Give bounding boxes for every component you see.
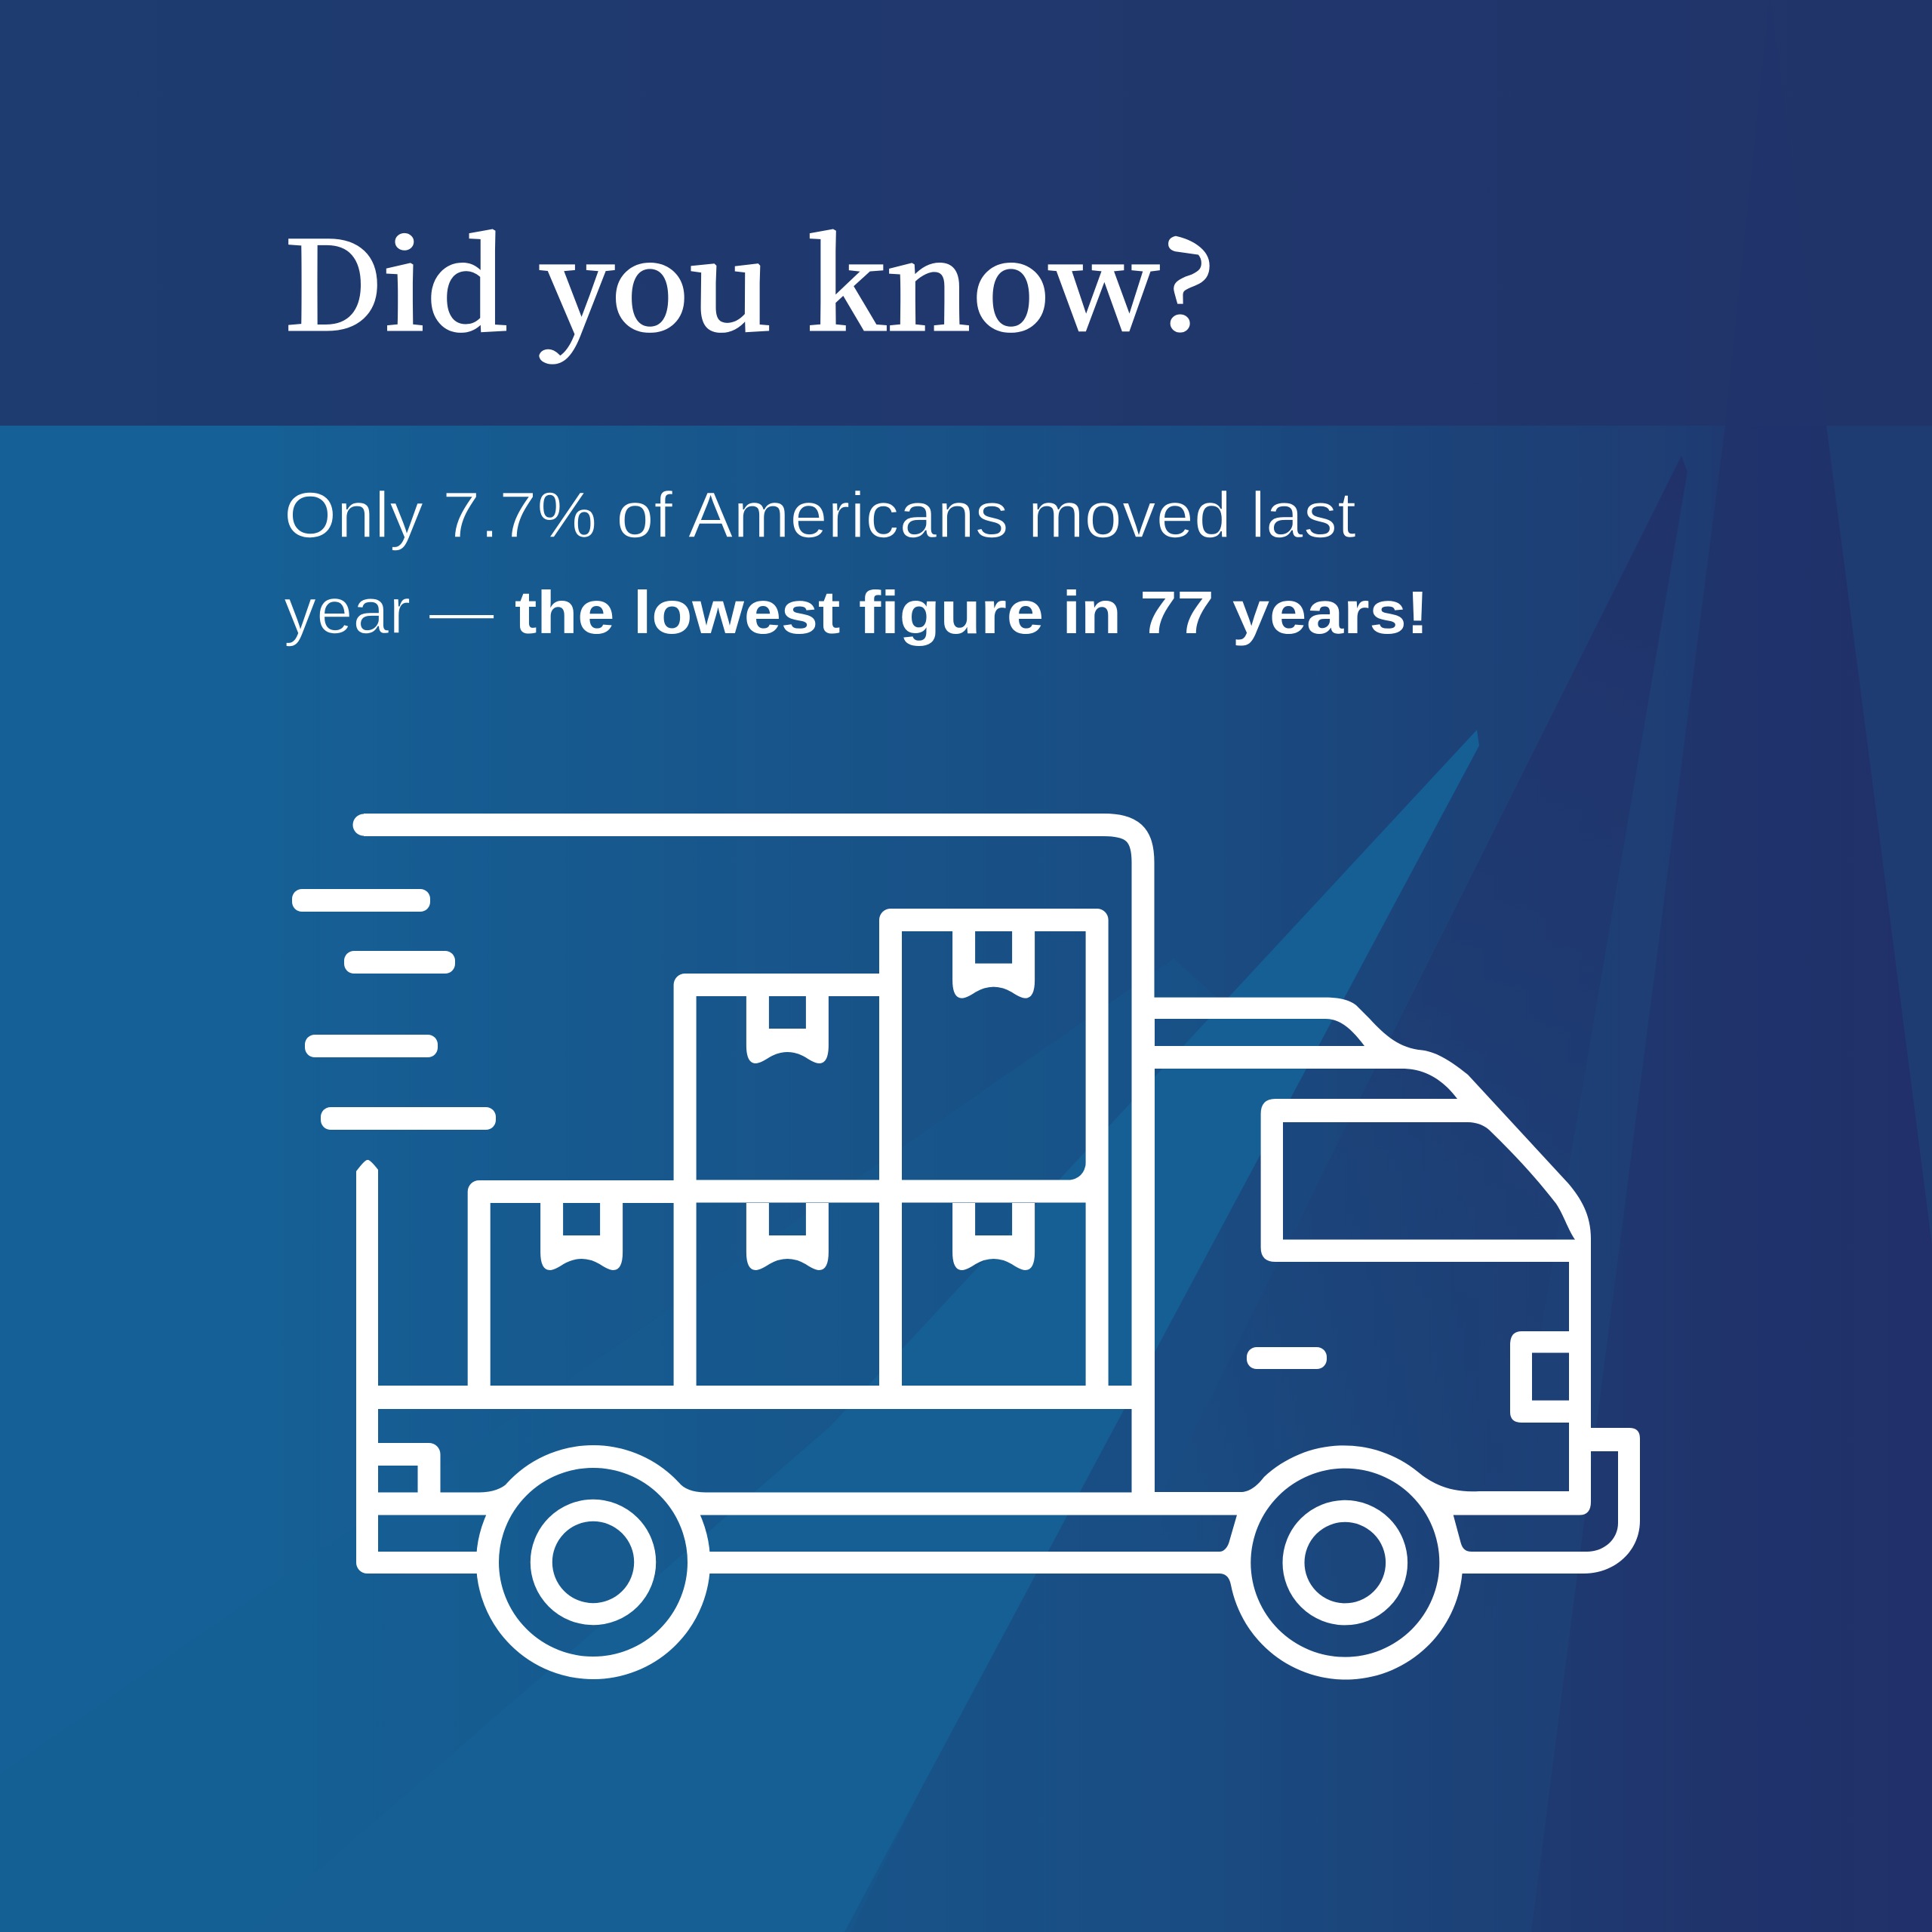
box tape: top middle box bbox=[746, 996, 829, 1063]
title: Did you know? bbox=[283, 188, 1216, 365]
body text line 2 regular: year — bbox=[284, 575, 494, 648]
box tape: bottom right box bbox=[952, 1203, 1035, 1270]
truck bed frame and box outlines bbox=[364, 825, 1144, 1562]
wheel arch fillets bbox=[479, 1482, 512, 1502]
post tip bbox=[356, 1160, 378, 1176]
speed lines bbox=[292, 889, 496, 1130]
rear wheel bbox=[488, 1457, 699, 1668]
body text line 1: Only 7.7% of Americans moved last bbox=[284, 479, 1356, 552]
box tape: top right box bbox=[952, 931, 1035, 998]
front wheel hub bbox=[1294, 1511, 1397, 1614]
truck cab silhouette with window, bumper and front wheel arch bbox=[1143, 998, 1640, 1680]
door handle bbox=[1247, 1347, 1327, 1369]
box tape: bottom left box bbox=[540, 1203, 623, 1270]
icon: moving truck with boxes bbox=[292, 825, 1640, 1680]
box corner fillet bbox=[1068, 1162, 1086, 1180]
body text line 2 bold: the lowest figure in 77 years! bbox=[515, 579, 1429, 646]
box tape: bottom middle box bbox=[746, 1203, 829, 1270]
body text bbox=[284, 479, 1429, 648]
